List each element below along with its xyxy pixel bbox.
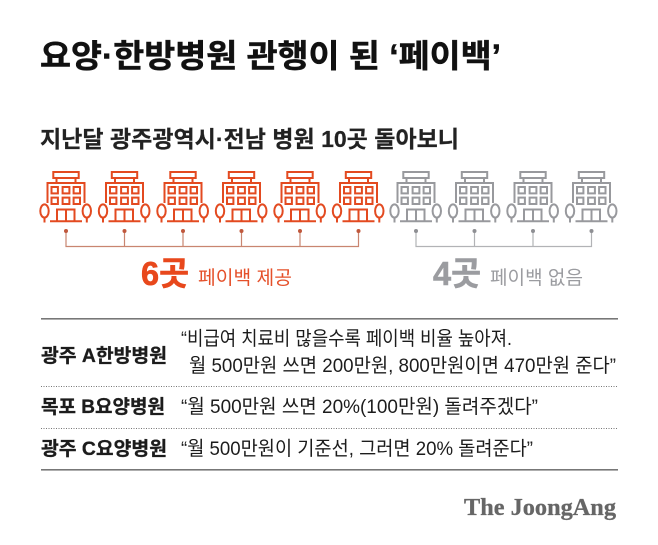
icon: hospital 8 [449,172,500,222]
label: 6 hospitals with payback: 페이백 제공 [198,267,292,289]
logo: The JoongAng: The JoongAng [464,495,616,521]
bracket: grey connector [414,229,594,246]
row: Mokpo B: 목포 B요양병원 [41,396,165,418]
icon: hospital 1 [40,172,91,222]
label: 6 hospitals with payback: 6곳 [141,255,189,292]
row: Gwangju C [41,438,533,460]
icon: hospital 3 [157,172,208,222]
icon: hospital 7 [390,172,441,222]
label: 4 hospitals without payback [433,255,583,292]
row: Gwangju A: 광주 A한방병원 [41,345,167,367]
row: Gwangju C: 광주 C요양병원 [41,438,167,460]
row: Gwangju C: “월 500만원이 기준선, 그러면 20% 돌려준다” [181,438,533,460]
label: 4 hospitals without payback: 페이백 없음 [490,267,583,289]
row: Gwangju A [41,328,616,377]
subtitle: 지난달 광주광역시·전남 병원 10곳 돌아보니 [40,126,459,152]
title: 요양·한방병원 관행이 된 ‘페이백’ [40,38,501,74]
row: Gwangju A: “비급여 치료비 많을수록 페이백 비율 높아져. [181,328,512,350]
bracket: orange connector [64,229,360,246]
icon: hospital 6 [333,172,384,222]
icons: four grey hospitals without payback [390,172,616,222]
label: 6 hospitals with payback [141,255,292,292]
row: Gwangju A: 월 500만원 쓰면 200만원, 800만원이면 470만원 준다” [189,355,616,377]
icons: six orange hospitals with payback [40,172,384,222]
icon: hospital 2 [99,172,150,222]
icon: hospital 4 [216,172,266,222]
table: hospital quotes [41,318,618,471]
icon: hospital 10 [566,172,616,222]
icon: hospital 5 [274,172,325,222]
icon: hospital 9 [507,172,558,222]
label: 4 hospitals without payback: 4곳 [433,255,481,292]
row: Mokpo B: “월 500만원 쓰면 20%(100만원) 돌려주겠다” [181,396,538,418]
